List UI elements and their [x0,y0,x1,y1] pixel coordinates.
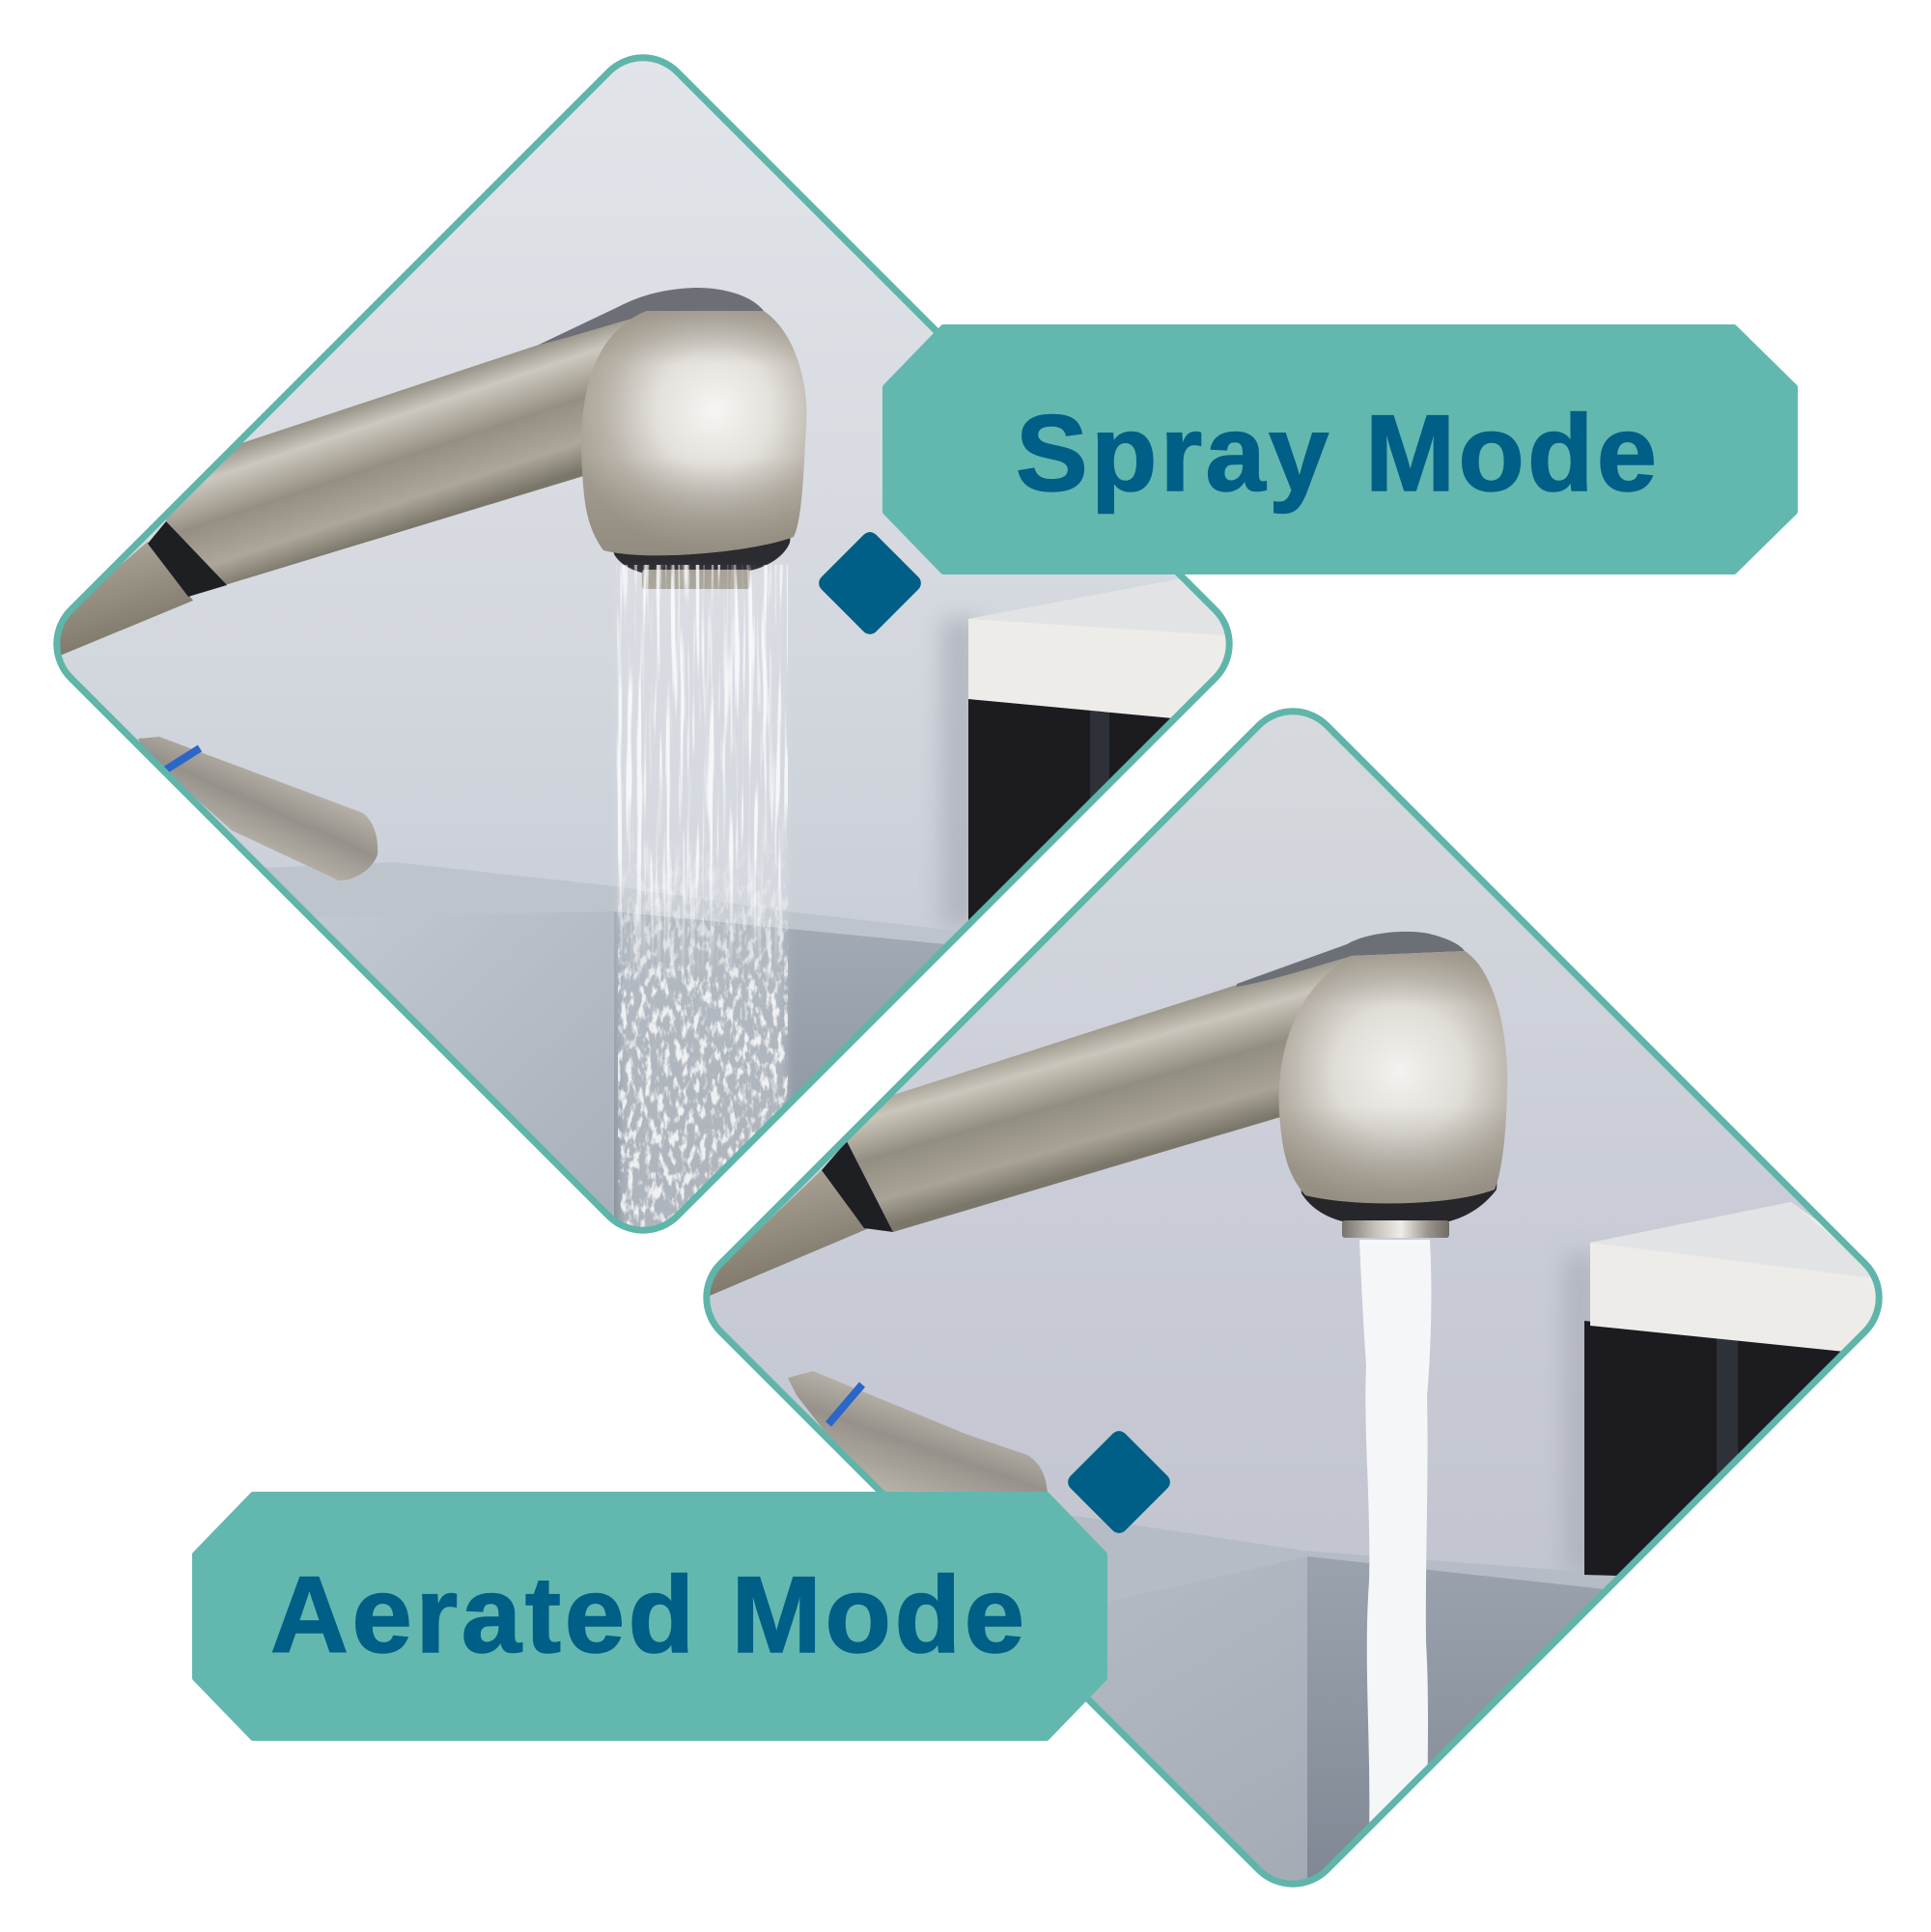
sink basin [266,862,950,1227]
icon: spray mode diamond marker [815,528,925,638]
handle lever [788,1371,1048,1495]
panel: spray mode photo [37,38,1255,1255]
spray head button [539,288,764,345]
photo scene: spray mode [39,39,1255,1255]
white counter [968,579,1226,718]
handle lever [138,737,378,881]
aerated water stream [1359,1240,1431,1834]
diamond frame [37,38,1249,1250]
label: spray mode [885,327,1795,572]
diamond frame [686,691,1899,1904]
aerator nozzle [1301,1182,1497,1238]
counter shadow on wall [941,618,980,927]
icon: aerated mode diamond marker [1064,1427,1174,1537]
spray water [616,565,788,1241]
heading: aerated mode: Aerated Mode [270,1554,1024,1675]
spray head button [1237,932,1465,987]
photo scene: aerated mode [695,700,1892,1897]
spout tube and pipe [53,311,657,658]
spray nozzle [614,538,791,589]
sink basin [1062,1514,1622,1892]
white counter [1590,1202,1892,1357]
panel: aerated mode photo [686,691,1899,1904]
black cabinet [968,699,1170,920]
black cabinet [1584,1321,1840,1576]
counter shadow on wall [1564,1255,1598,1574]
spray head [1279,951,1507,1203]
spray head [581,311,806,555]
spout tube and pipe [710,952,1352,1296]
heading: spray mode: Spray Mode [1016,393,1657,514]
label: aerated mode [195,1495,1105,1738]
